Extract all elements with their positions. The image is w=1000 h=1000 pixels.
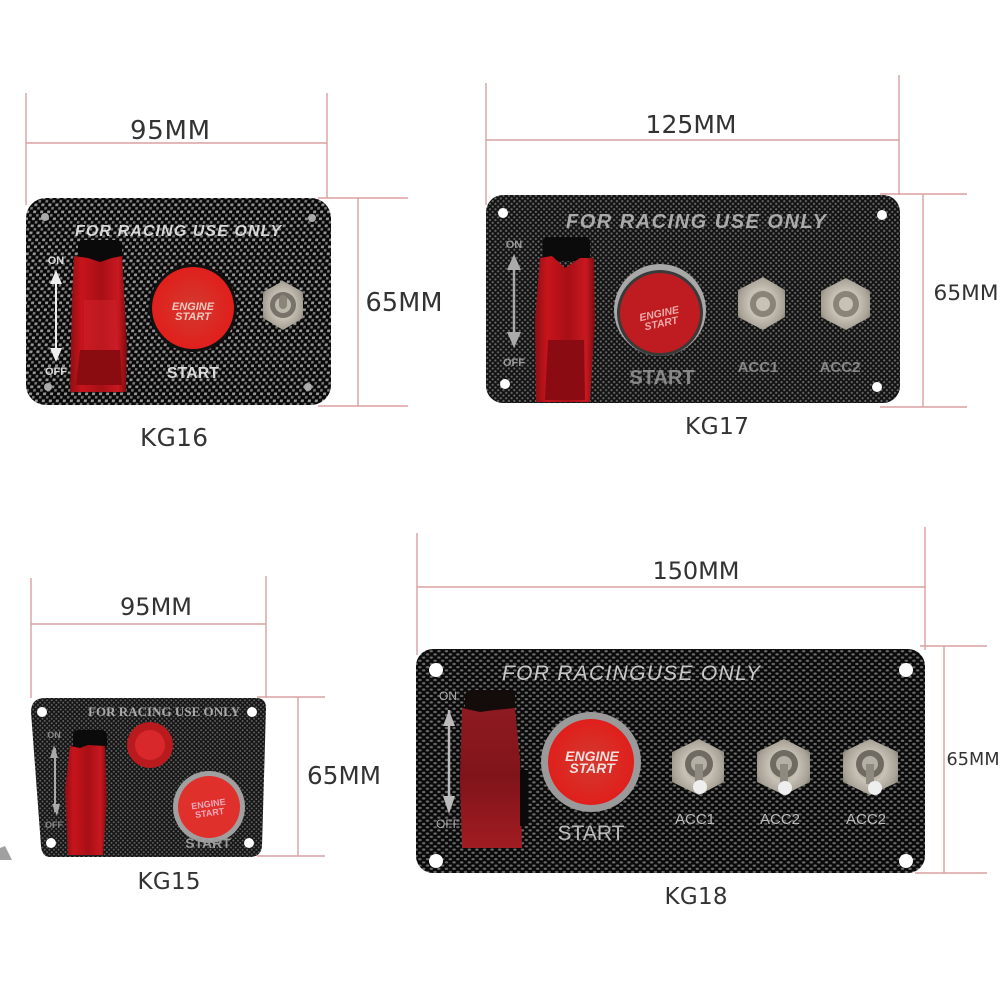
plate: KG15 carbon fibre — [31, 698, 266, 857]
model label: KG18: KG18 — [664, 884, 728, 910]
label: on off arrow — [45, 255, 67, 378]
panel heading: FOR RACING USE ONLY — [88, 704, 241, 719]
height label: KG16: 65MM — [366, 288, 442, 318]
icon: engine start button: START — [175, 311, 212, 323]
label: on off arrow — [436, 689, 460, 831]
panel heading: FOR RACINGUSE ONLY — [502, 662, 762, 685]
icon: red safety cover — [70, 240, 127, 392]
mounting holes — [498, 208, 887, 392]
icon: red safety cover — [535, 237, 595, 402]
plate: KG17 carbon fibre — [486, 195, 900, 403]
width label: KG17: 125MM — [646, 110, 736, 139]
label: on off arrow: ON — [47, 730, 61, 740]
icon: toggle ACC2 second — [843, 739, 898, 795]
mounting screws — [41, 213, 316, 391]
icon: toggle ACC2 — [757, 739, 810, 795]
icon: engine start button: ENGINE — [191, 797, 226, 811]
model label: KG16: KG16 — [140, 423, 208, 452]
labels: ACC1 ACC2 ACC2: ACC2 — [760, 811, 800, 828]
icon: engine start button — [149, 264, 237, 352]
icon: engine start button: START — [194, 806, 225, 820]
labels: ACC1 ACC2 ACC2: ACC2 — [846, 811, 886, 828]
label: start: START — [558, 822, 625, 845]
width label: KG18: 150MM — [652, 557, 740, 585]
dimension lines: KG16 — [26, 93, 408, 406]
label: on off arrow: ON — [439, 689, 457, 703]
label: on off arrow: OFF — [436, 817, 460, 831]
mounting holes — [429, 663, 913, 868]
panel: KG18 — [416, 649, 925, 873]
label: start: START — [167, 365, 219, 382]
labels: ACC1 ACC2: ACC2 — [820, 359, 860, 376]
label: start: START — [185, 835, 231, 851]
panel: KG15 — [31, 698, 266, 857]
icon: engine start button: ENGINE — [638, 304, 681, 324]
icon: red safety cover — [65, 730, 107, 855]
icon: toggle switch — [263, 281, 303, 330]
icon: engine start button: ENGINE — [172, 301, 215, 313]
dimension lines: KG15 — [31, 576, 325, 856]
label: on off arrow — [503, 239, 525, 369]
height label: KG15: 65MM — [307, 761, 381, 790]
plate: KG16 carbon fibre — [26, 198, 331, 405]
icon: indicator lamp — [127, 722, 173, 768]
label: on off arrow: OFF — [503, 357, 525, 369]
panel heading: FOR RACING USE ONLY — [75, 223, 282, 240]
height label: KG17: 65MM — [934, 281, 998, 306]
height label: KG18: 65MM — [946, 750, 1000, 770]
icon: engine start button — [541, 712, 641, 812]
label: on off arrow: OFF — [45, 820, 63, 830]
labels: ACC1 ACC2: ACC1 — [738, 359, 778, 376]
labels: ACC1 ACC2 ACC2: ACC1 — [675, 811, 715, 828]
panel: KG16 — [26, 198, 331, 405]
labels: ACC1 ACC2 ACC2 — [675, 811, 886, 828]
icon: engine start button: ENGINE — [565, 748, 619, 764]
icon: engine start button — [173, 771, 245, 843]
labels: ACC1 ACC2 — [738, 359, 860, 376]
icon: toggle ACC2 — [821, 278, 870, 330]
dimension lines: KG17 — [486, 75, 967, 407]
icon: engine start button — [614, 264, 706, 356]
icon: engine start button: START — [569, 760, 616, 776]
label: on off arrow: ON — [48, 255, 64, 267]
icon: red safety cover — [460, 690, 528, 848]
label: start: START — [629, 367, 695, 389]
mounting holes — [37, 707, 257, 848]
dimension lines: KG18 — [417, 527, 987, 873]
model label: KG15: KG15 — [138, 869, 200, 895]
icon: toggle ACC1 — [738, 277, 785, 330]
label: on off arrow — [45, 730, 63, 830]
label: on off arrow: ON — [506, 239, 522, 251]
width label: KG15: 95MM — [120, 593, 192, 621]
edge fragment: grey triangle — [0, 846, 12, 860]
panel: KG17 — [486, 195, 900, 403]
label: on off arrow: OFF — [45, 366, 67, 378]
icon: toggle ACC1 — [672, 739, 724, 795]
width label: KG16: 95MM — [130, 116, 210, 146]
plate: KG18 carbon fibre — [416, 649, 925, 873]
panel heading: FOR RACING USE ONLY — [566, 211, 828, 233]
icon: engine start button: START — [643, 314, 681, 333]
model label: KG17: KG17 — [685, 413, 749, 440]
